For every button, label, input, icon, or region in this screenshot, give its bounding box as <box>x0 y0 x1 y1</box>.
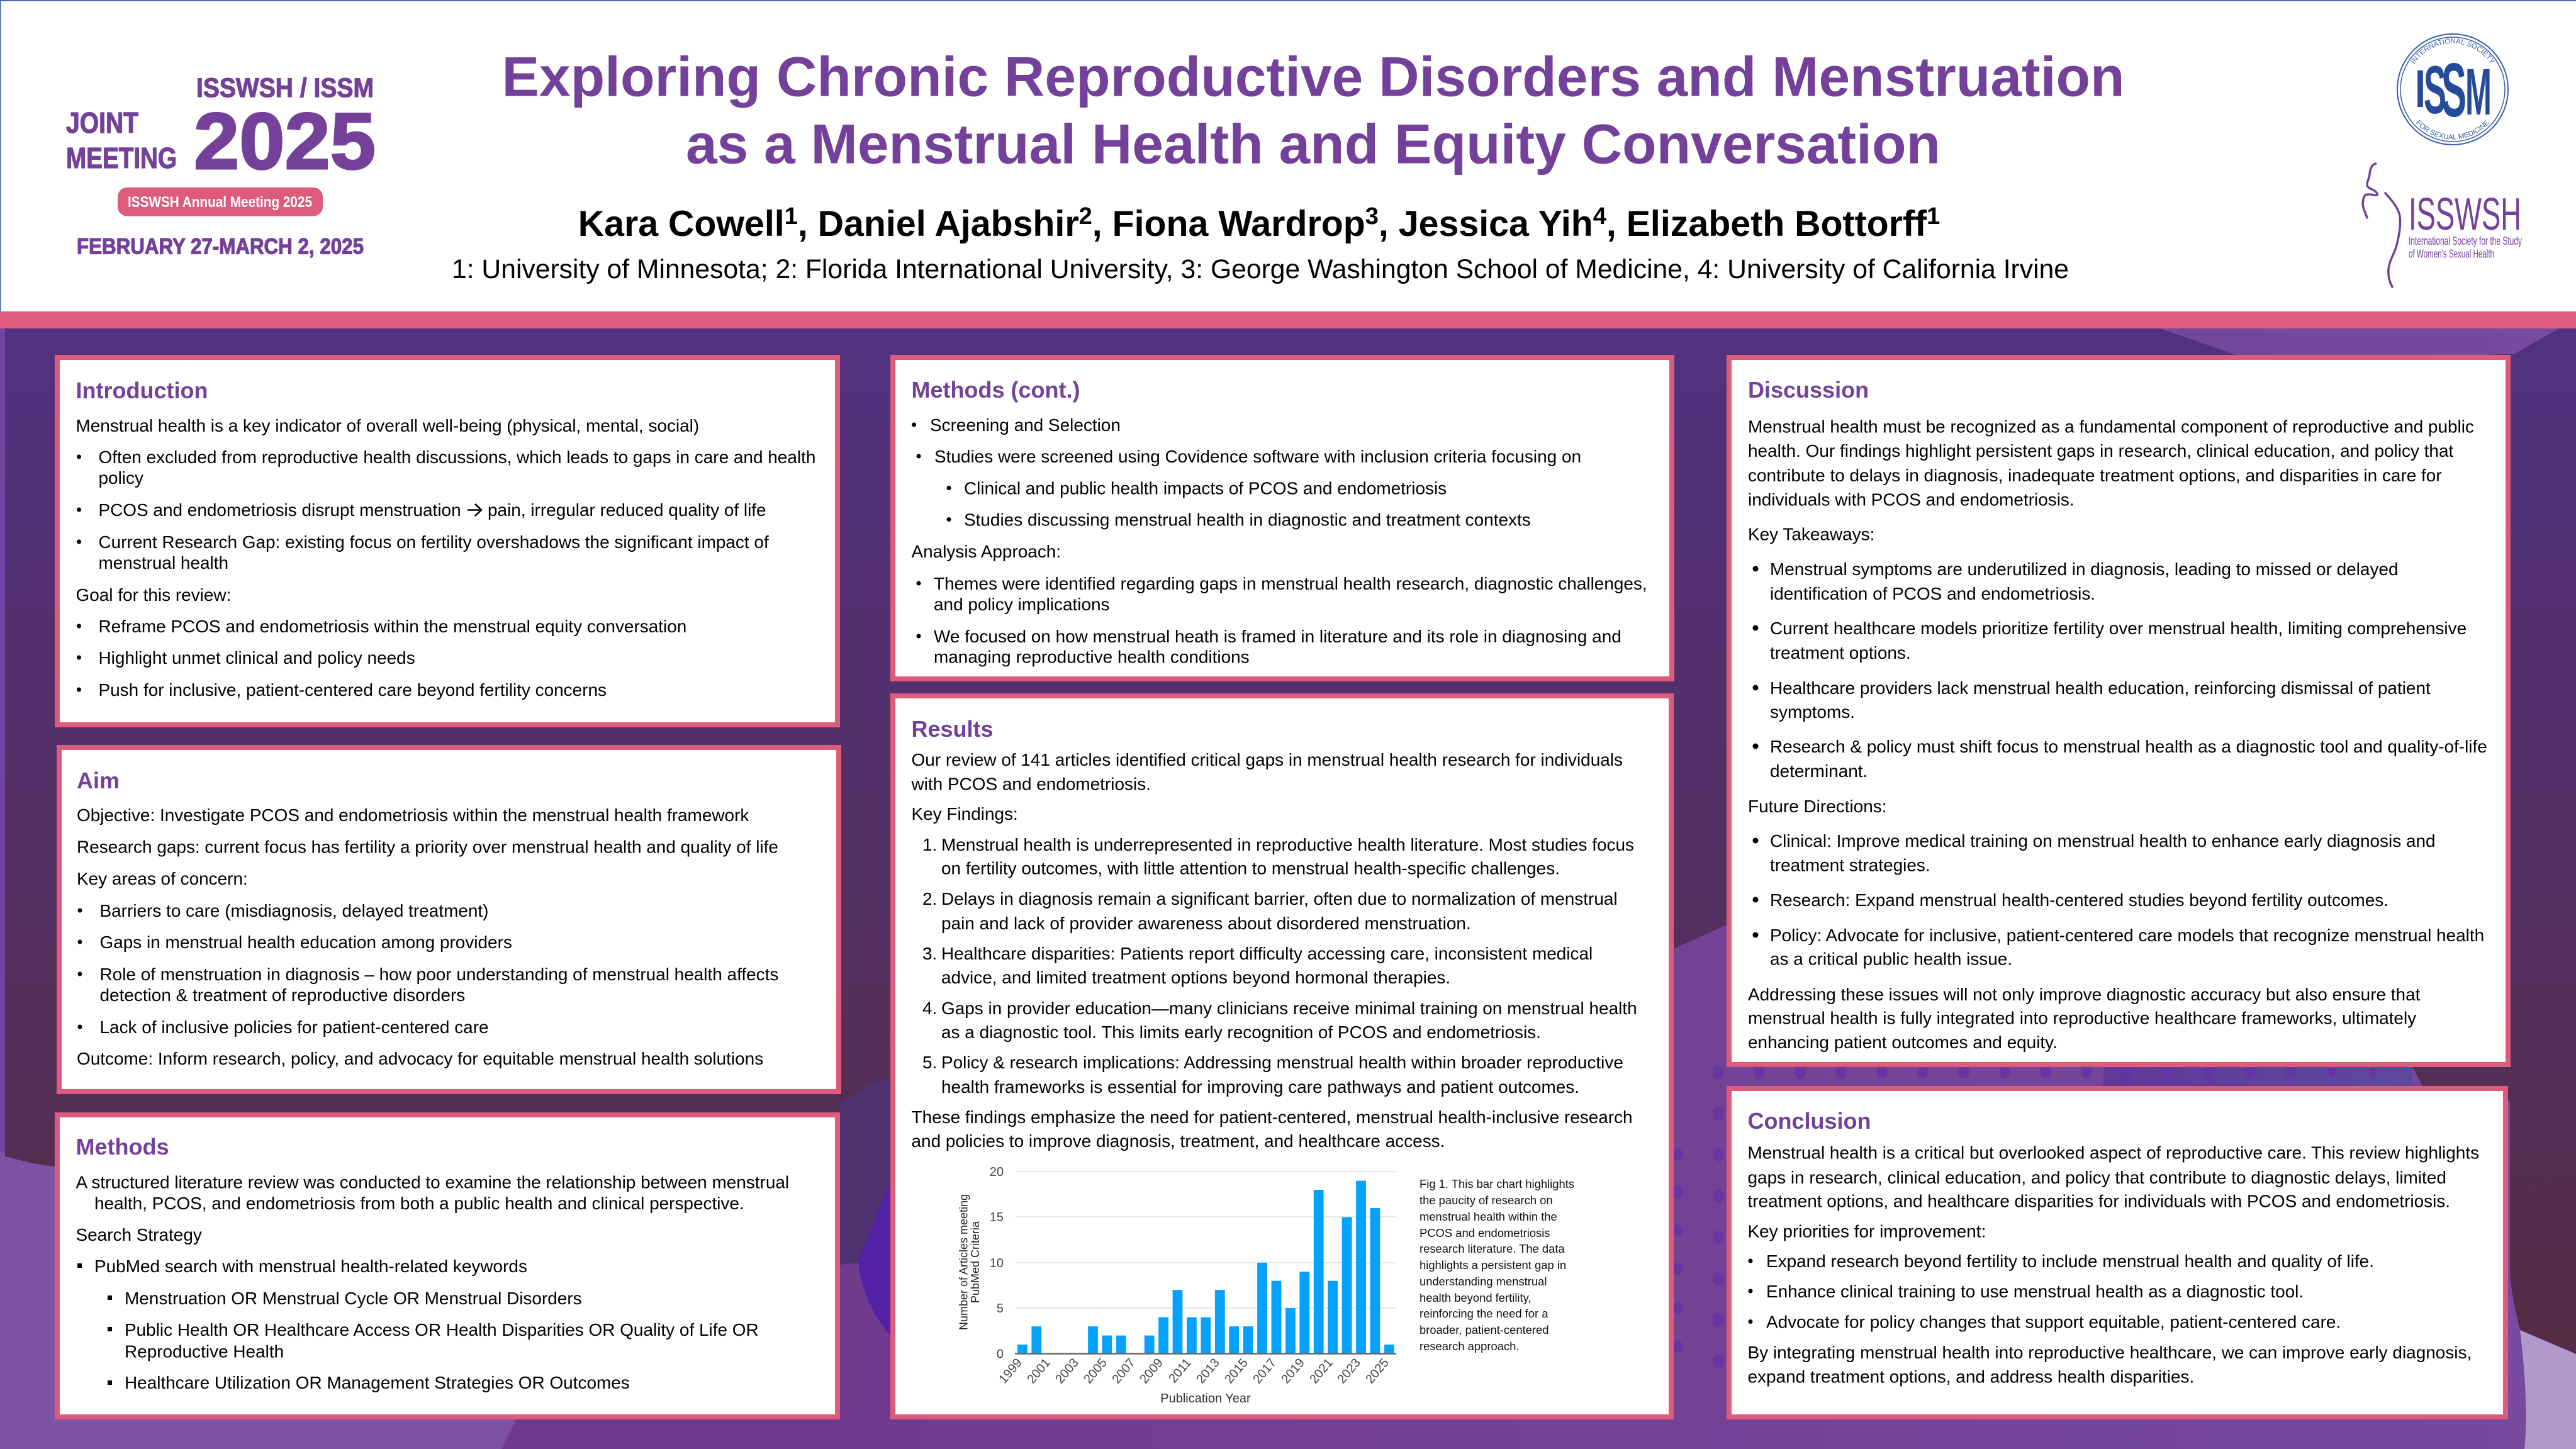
text block: results body: with PCOS and endometriosis. <box>911 774 1151 794</box>
text block: results body: as a diagnostic tool. This limits early recognition of PCOS and endometriosis. <box>941 1022 1541 1042</box>
text block: discussion body: Research & policy must shift focus to menstrual health as a diagnostic tool and quality-of-life <box>1770 737 2487 756</box>
bar chart: articles per publication year: 2025 <box>1363 1356 1392 1386</box>
text block: results body: Our review of 141 articles identified critical gaps in menstrual health research for individuals <box>911 750 1623 769</box>
affiliations: 1: University of Minnesota; 2: Florida International University, 3: George Washington School of Medicine, 4: University of California Irvine <box>452 254 2069 284</box>
text block: discussion body: individuals with PCOS and endometriosis. <box>1748 490 2075 510</box>
text block: aim body: Role of menstruation in diagnosis – how poor understanding of menstrual health affects <box>99 965 778 984</box>
text block: methods body: Healthcare Utilization OR Management Strategies OR Outcomes <box>125 1373 630 1392</box>
text block: methods body: Reproductive Health <box>125 1341 284 1362</box>
figure caption: research literature. The data <box>1420 1242 1565 1255</box>
bar chart: articles per publication year: 2003 <box>1053 1356 1082 1386</box>
authors: , Jessica Yih <box>1379 204 1593 244</box>
bar chart: articles per publication year: 2017 <box>1250 1356 1279 1386</box>
bar chart: articles per publication year: 5 <box>997 1302 1004 1316</box>
authors: 3 <box>1365 203 1379 230</box>
logo: ISSM: I <box>2415 59 2426 118</box>
text block: results body: Delays in diagnosis remain a significant barrier, often due to normalization of menstrual <box>941 889 1618 909</box>
text block: results body: 1. <box>922 835 937 854</box>
text block: methods continued body: Screening and Selection <box>930 415 1121 435</box>
bar chart: articles per publication year: PubMed Criteria <box>969 1221 982 1303</box>
bar chart: articles per publication year: 15 <box>990 1211 1004 1224</box>
text block: aim body: Outcome: Inform research, policy, and advocacy for equitable menstrual health solutions <box>77 1049 763 1068</box>
text block: aim body: Barriers to care (misdiagnosis, delayed treatment) <box>99 901 488 920</box>
text block: introduction body: Highlight unmet clinical and policy needs <box>98 648 415 668</box>
heading: Conclusion: Conclusion <box>1748 1108 1871 1134</box>
text block: conclusion body: Expand research beyond fertility to include menstrual health and quality of life. <box>1766 1251 2374 1271</box>
logo: ISSWSH / ISSM Joint Meeting 2025: ISSWSH Annual Meeting 2025 <box>128 194 312 211</box>
text block: results body: pain and lack of provider awareness about disordered menstruation. <box>941 914 1471 933</box>
text block: conclusion body: treatment options, and healthcare disparities for individuals with PCOS and endometriosis. <box>1748 1192 2450 1211</box>
bar chart: articles per publication year: Number of Articles meeting <box>958 1194 970 1330</box>
text block: methods continued body: Clinical and public health impacts of PCOS and endometriosis <box>964 478 1447 498</box>
text block: conclusion body: Advocate for policy changes that support equitable, patient-centered care. <box>1766 1312 2341 1331</box>
logo: ISSWSH <box>2363 164 2522 287</box>
text block: methods body: Menstruation OR Menstrual Cycle OR Menstrual Disorders <box>125 1289 582 1308</box>
text block: conclusion body: By integrating menstrual health into reproductive healthcare, we can improve early diagnosis, <box>1748 1343 2472 1362</box>
text block: results body: 2. <box>922 889 937 909</box>
text block: discussion body: treatment strategies. <box>1770 856 1930 875</box>
text block: introduction body: Reframe PCOS and endometriosis within the menstrual equity conversation <box>98 617 686 636</box>
logo: ISSWSH / ISSM Joint Meeting 2025: JOINT <box>66 106 138 139</box>
panel: Results <box>893 696 1671 1417</box>
text block: discussion body: Healthcare providers lack menstrual health education, reinforcing dismissal of patient <box>1770 678 2431 698</box>
bar chart: articles per publication year: 2009 <box>1137 1356 1166 1386</box>
heading: Methods (cont.): Methods (cont.) <box>911 377 1080 403</box>
logo: ISSWSH / ISSM Joint Meeting 2025 <box>66 73 376 259</box>
text block: results body: Menstrual health is underrepresented in reproductive health literature. Most studies focus <box>941 835 1634 854</box>
text block: discussion body: Menstrual health must be recognized as a fundamental component of reproductive and public <box>1748 417 2474 437</box>
logo: ISSWSH: International Society for the Study <box>2409 235 2522 247</box>
figure caption: the paucity of research on <box>1420 1194 1553 1207</box>
text block: discussion body: Future Directions: <box>1748 797 1886 816</box>
bar chart: articles per publication year <box>958 1165 1396 1406</box>
bar chart: articles per publication year: 2013 <box>1194 1356 1223 1386</box>
heading: Aim: Aim <box>77 768 120 793</box>
figure caption: highlights a persistent gap in <box>1420 1258 1566 1272</box>
text block: discussion body: Research: Expand menstrual health-centered studies beyond fertility outcomes. <box>1770 890 2388 910</box>
logo: ISSM: M <box>2465 55 2492 129</box>
text block: discussion body: Menstrual symptoms are underutilized in diagnosis, leading to missed or delayed <box>1770 559 2399 579</box>
text block: discussion body: identification of PCOS and endometriosis. <box>1770 584 2095 603</box>
text block: results body: These findings emphasize the need for patient-centered, menstrual health-inclusive research <box>911 1107 1633 1127</box>
text block: discussion body: Policy: Advocate for inclusive, patient-centered care models that recognize menstrual health <box>1770 926 2484 945</box>
authors: 2 <box>1079 203 1092 230</box>
bar chart: articles per publication year: 2011 <box>1166 1356 1194 1385</box>
bar chart: articles per publication year: Publication Year <box>1160 1392 1251 1406</box>
authors: 4 <box>1593 203 1606 230</box>
text block: introduction body <box>76 416 815 700</box>
text block: results body: and policies to improve diagnosis, treatment, and healthcare access. <box>911 1131 1445 1151</box>
authors: , Fiona Wardrop <box>1092 204 1365 244</box>
text block: results body: Healthcare disparities: Patients report difficulty accessing care, inconsistent medical <box>941 944 1593 963</box>
title: as a Menstrual Health and Equity Conversation <box>686 112 1940 175</box>
panel: Aim <box>59 747 839 1092</box>
text block: methods continued body: We focused on how menstrual heath is framed in literature and its role in diagnosing and <box>934 627 1621 646</box>
panel: Conclusion <box>1729 1088 2506 1417</box>
text block: conclusion body: expand treatment options, and address health disparities. <box>1748 1367 2194 1387</box>
heading: Introduction: Introduction <box>76 378 208 403</box>
text block: results body <box>911 750 1637 1151</box>
authors: 1 <box>1927 203 1940 230</box>
text block: results body: on fertility outcomes, with little attention to menstrual health-specific challenges. <box>941 858 1560 878</box>
logo: ISSWSH / ISSM Joint Meeting 2025: 2025 <box>194 96 376 186</box>
text block: methods continued body: Analysis Approach: <box>911 542 1061 561</box>
title: Exploring Chronic Reproductive Disorders and Menstruation <box>501 45 2125 108</box>
text block: methods continued body: managing reproductive health conditions <box>934 647 1250 667</box>
figure caption: Fig 1. This bar chart highlights <box>1420 1177 1574 1190</box>
text block: discussion body: symptoms. <box>1770 702 1855 722</box>
text block: conclusion body: Key priorities for improvement: <box>1748 1222 1986 1241</box>
text block: aim body: detection & treatment of reproductive disorders <box>99 985 465 1005</box>
text block: introduction body: PCOS and endometriosis disrupt menstruation <box>98 500 461 520</box>
text block: discussion body: contribute to delays in diagnosis, inadequate treatment options, and disparities in care for <box>1748 466 2442 485</box>
heading: Methods: Methods <box>76 1134 169 1160</box>
text block: conclusion body: gaps in research, clinical education, and policy that contribute to diagnostic delays, limited <box>1748 1168 2446 1187</box>
logo: ISSM: FOR SEXUAL MEDICINE <box>2416 120 2489 140</box>
logo: ISSWSH: of Women's Sexual Health <box>2409 248 2494 260</box>
text block: discussion body: Current healthcare models prioritize fertility over menstrual health, limiting comprehensive <box>1770 618 2467 638</box>
text block: discussion body: as a critical public health issue. <box>1770 949 2012 969</box>
panel: Methods (cont.) <box>893 357 1672 679</box>
text block: results body: Key Findings: <box>911 804 1018 824</box>
text block: aim body: Lack of inclusive policies for patient-centered care <box>99 1017 489 1037</box>
text block: aim body: Research gaps: current focus has fertility a priority over menstrual health and quality of life <box>77 837 778 857</box>
bar chart: articles per publication year: 2007 <box>1109 1356 1138 1386</box>
text block: methods body: Search Strategy <box>76 1225 202 1245</box>
header band <box>0 0 2576 328</box>
text block: conclusion body <box>1748 1143 2479 1387</box>
logo: ISSWSH / ISSM Joint Meeting 2025: ISSWSH / ISSM <box>196 73 374 103</box>
text block: results body: Policy & research implications: Addressing menstrual health within broader reproductive <box>941 1053 1623 1072</box>
authors: 1 <box>785 203 798 230</box>
text block: results body: advice, and limited treatment options beyond hormonal therapies. <box>941 968 1450 987</box>
text block: aim body <box>77 805 778 1068</box>
logo: ISSWSH / ISSM Joint Meeting 2025: MEETING <box>66 142 177 174</box>
text block: aim body: Objective: Investigate PCOS and endometriosis within the menstrual health framework <box>77 805 749 825</box>
panel: Introduction <box>57 357 837 725</box>
logo: ISSM: S <box>2424 52 2446 128</box>
text block: methods body: health, PCOS, and endometriosis from both a public health and clinical perspective. <box>94 1194 744 1213</box>
authors: , Elizabeth Bottorff <box>1606 204 1927 244</box>
logo: ISSM: S <box>2441 47 2467 133</box>
figure caption: menstrual health within the <box>1420 1210 1557 1223</box>
bar chart: articles per publication year: 0 <box>997 1348 1004 1362</box>
text block: introduction body: policy <box>98 468 143 488</box>
text block: methods body: A structured literature review was conducted to examine the relationship between menstrual <box>76 1173 789 1192</box>
logo: ISSWSH / ISSM Joint Meeting 2025: FEBRUARY 27-MARCH 2, 2025 <box>77 234 364 259</box>
figure caption: health beyond fertility, <box>1420 1291 1532 1304</box>
text block: discussion body: Clinical: Improve medical training on menstrual health to enhance early diagnosis and <box>1770 831 2436 851</box>
text block: discussion body: health. Our findings highlight persistent gaps in research, clinical education, and policy that <box>1748 441 2454 461</box>
text block: discussion body: enhancing patient outcomes and equity. <box>1748 1032 2058 1052</box>
text block: introduction body: menstrual health <box>98 553 228 573</box>
text block: aim body: Key areas of concern: <box>77 869 248 888</box>
text block: discussion body: menstrual health is fully integrated into reproductive healthcare frameworks, ultimately <box>1748 1008 2416 1028</box>
text block: introduction body: Push for inclusive, patient-centered care beyond fertility concerns <box>98 680 607 700</box>
text block: discussion body: Key Takeaways: <box>1748 525 1874 544</box>
bar chart: articles per publication year: 2021 <box>1307 1356 1336 1386</box>
text block: results body: health frameworks is essential for improving care pathways and patient outcomes. <box>941 1077 1579 1097</box>
bar chart: articles per publication year: 2001 <box>1024 1356 1053 1386</box>
logo: ISSM <box>2397 33 2509 145</box>
authors: Kara Cowell <box>578 204 785 244</box>
text block: discussion body: Addressing these issues will not only improve diagnostic accuracy but also ensure that <box>1748 985 2421 1004</box>
background: purple shapes <box>0 328 2576 1449</box>
text block: methods continued body: Studies discussing menstrual health in diagnostic and treatment contexts <box>964 510 1531 530</box>
text block: conclusion body: Menstrual health is a critical but overlooked aspect of reproductive care. This review highlights <box>1748 1143 2479 1163</box>
text block: methods body <box>76 1173 789 1392</box>
panel: Methods <box>57 1115 837 1417</box>
figure caption: reinforcing the need for a <box>1420 1307 1548 1320</box>
bar chart: articles per publication year: 2015 <box>1222 1356 1251 1386</box>
text block: introduction body: pain, irregular reduced quality of life <box>488 500 766 520</box>
heading: Results: Results <box>911 716 994 742</box>
bar chart: articles per publication year: 2023 <box>1335 1356 1364 1386</box>
text block: methods continued body <box>911 415 1647 667</box>
heading: Discussion: Discussion <box>1748 377 1869 403</box>
text block: methods continued body: Studies were screened using Covidence software with inclusion criteria focusing on <box>934 447 1581 466</box>
figure caption <box>1420 1177 1574 1353</box>
text block: conclusion body: Enhance clinical training to use menstrual health as a diagnostic tool. <box>1766 1282 2304 1301</box>
bar chart: articles per publication year: 1999 <box>996 1356 1025 1386</box>
authors: , Daniel Ajabshir <box>798 204 1079 244</box>
title <box>501 45 2125 175</box>
text block: methods continued body: and policy implications <box>934 595 1110 614</box>
text block: results body: 3. <box>922 944 937 963</box>
figure caption: research approach. <box>1420 1340 1519 1353</box>
text block: results body: 5. <box>922 1053 937 1072</box>
text block: results body: Gaps in provider education—many clinicians receive minimal training on menstrual health <box>941 999 1637 1018</box>
text block: discussion body: treatment options. <box>1770 643 1911 663</box>
text block: discussion body <box>1748 417 2487 1052</box>
text block: results body: 4. <box>922 999 937 1018</box>
figure caption: broader, patient-centered <box>1420 1323 1549 1336</box>
text block: aim body: Gaps in menstrual health education among providers <box>99 932 512 952</box>
text block: introduction body: Goal for this review: <box>76 585 231 605</box>
bar chart: articles per publication year: 10 <box>990 1256 1004 1270</box>
figure caption: PCOS and endometriosis <box>1420 1226 1550 1239</box>
bar chart: articles per publication year: 2019 <box>1279 1356 1308 1386</box>
text block: introduction body: Often excluded from reproductive health discussions, which leads to gaps in care and health <box>98 447 815 467</box>
text block: introduction body: Menstrual health is a key indicator of overall well-being (physical, mental, social) <box>76 416 699 435</box>
figure caption: understanding menstrual <box>1420 1275 1547 1288</box>
text block: discussion body: determinant. <box>1770 761 1868 781</box>
bar chart: articles per publication year: 20 <box>990 1165 1004 1179</box>
text block: methods body: PubMed search with menstrual health-related keywords <box>94 1256 527 1276</box>
text block: introduction body: Current Research Gap: existing focus on fertility overshadows the significant impact of <box>98 532 769 552</box>
bar chart: articles per publication year: 2005 <box>1081 1356 1110 1386</box>
panel: Discussion <box>1729 357 2508 1065</box>
text block: methods continued body: Themes were identified regarding gaps in menstrual health research, diagnostic challenges, <box>934 574 1647 593</box>
logo: ISSM: INTERNATIONAL SOCIETY <box>2411 38 2495 64</box>
text block: methods body: Public Health OR Healthcare Access OR Health Disparities OR Quality of Life OR <box>125 1320 759 1340</box>
